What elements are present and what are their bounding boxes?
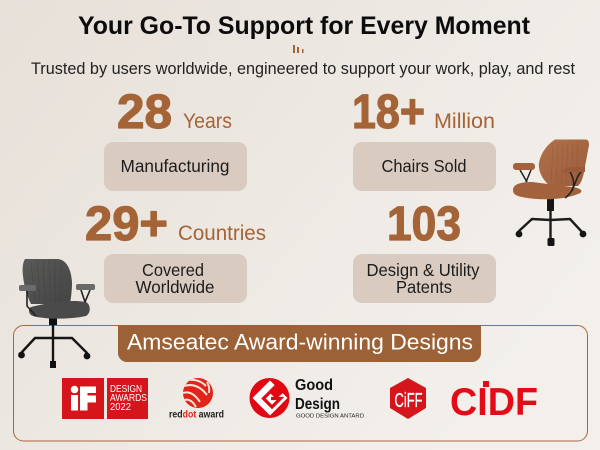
label: Manufacturing: [104, 142, 247, 191]
logo: reddot award: [169, 378, 224, 420]
subtitle: Trusted by users worldwide, engineered to support your work, play, and rest: [31, 60, 575, 78]
panel: 103 patents: [353, 198, 496, 303]
heading badge: Amseatec Award-winning Designs: [127, 330, 473, 354]
gray seat: [29, 301, 90, 319]
label: Covered Worldwide: Worldwide: [136, 277, 214, 297]
icon: decorative title marks: [293, 45, 304, 53]
logo: Good Design: Good: [295, 377, 333, 394]
label: Design & Utility Patents: Design & Utility: [366, 260, 480, 280]
label: Covered Worldwide: Covered: [142, 260, 204, 280]
logo: iF design awards: DESIGN: [110, 383, 142, 395]
icon: gray leather chair: [18, 259, 95, 368]
stat: 28 Years: Years: [183, 110, 232, 133]
logo: iF design awards: [62, 378, 148, 419]
title: Your Go-To Support for Every Moment: [78, 12, 531, 40]
stat: 29+ Countries: Countries: [178, 222, 266, 245]
label: Chairs Sold: Chairs Sold: [382, 156, 466, 176]
icon: brown leather chair: [513, 140, 589, 246]
heading badge: [118, 325, 481, 362]
logo: Good Design: Design: [295, 396, 340, 413]
label: Design & Utility Patents: [353, 254, 496, 303]
stat: 18+ Million: 18+: [352, 86, 425, 139]
panel: 18+ million chairs sold: [352, 86, 496, 191]
brown backrest: [539, 140, 589, 186]
logo: iF design awards: AWARDS: [110, 392, 147, 404]
label: Design & Utility Patents: Patents: [396, 277, 452, 297]
stat: 103: 103: [387, 198, 461, 251]
logo: Good Design: [250, 377, 364, 420]
stat: 28 Years: 28: [117, 86, 172, 139]
brown seat: [513, 182, 581, 199]
awards border: [14, 326, 588, 441]
label: Manufacturing: Manufacturing: [120, 156, 230, 176]
logo: reddot award: reddot award: [169, 410, 224, 420]
label: Chairs Sold: [353, 142, 496, 191]
panel: 28 years manufacturing: [104, 86, 247, 191]
logo: iF design awards: 2022: [110, 401, 131, 413]
logo: CIFF: CiFF: [394, 390, 422, 412]
stat: 18+ Million: [352, 86, 495, 139]
stat: 18+ Million: Million: [434, 110, 495, 133]
stat: 28 Years: [117, 86, 232, 139]
panel: awards: [14, 325, 588, 441]
logo: CIFF: [390, 378, 426, 419]
logo: CIDF: CIDF: [450, 381, 538, 424]
logo: Good Design: GOOD DESIGN ANTARD: [296, 414, 364, 420]
panel: 29+ countries: [85, 198, 266, 303]
stat: 29+ Countries: 29+: [85, 198, 168, 251]
gray backrest: [23, 259, 72, 304]
label: Covered Worldwide: [104, 254, 247, 303]
stat: 29+ Countries: [85, 198, 266, 251]
